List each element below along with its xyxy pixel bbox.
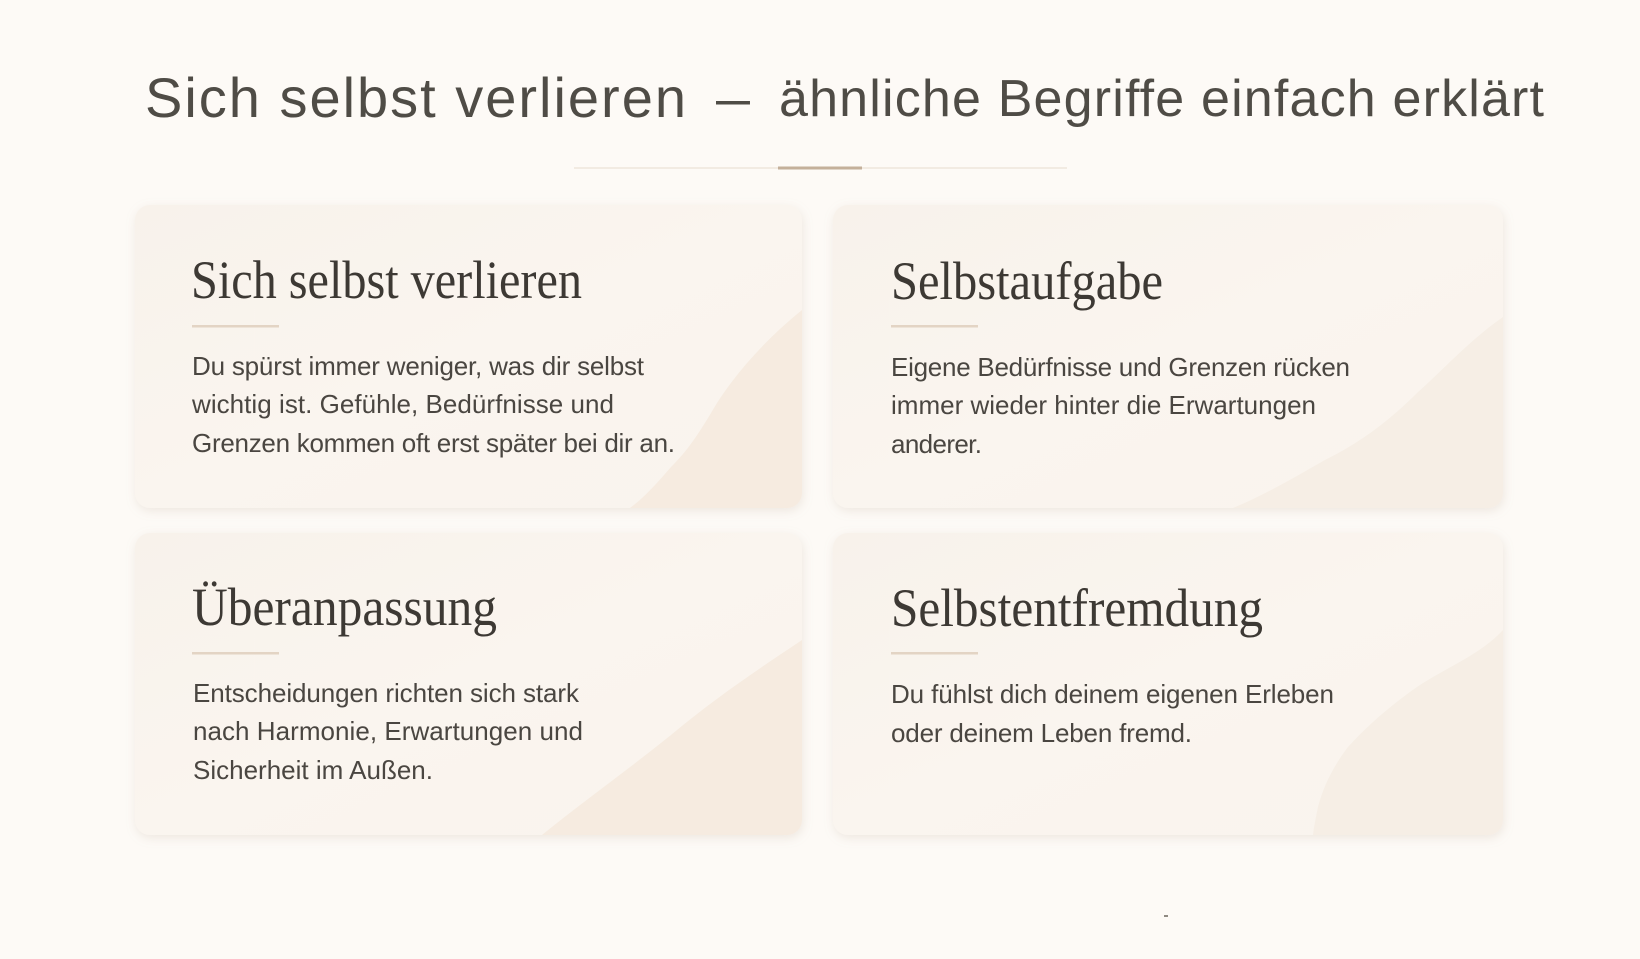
heading rule	[192, 325, 279, 328]
card text: nach Harmonie, Erwartungen und	[193, 716, 583, 746]
card text	[891, 352, 1350, 459]
card text: wichtig ist. Gefühle, Bedürfnisse und	[191, 389, 614, 419]
corner shape	[1313, 630, 1503, 835]
corner shape	[1233, 317, 1503, 508]
heading rule	[891, 652, 978, 654]
card text	[193, 678, 583, 785]
card heading: Selbstaufgabe	[891, 251, 1163, 311]
card heading: Selbstentfremdung	[891, 578, 1263, 638]
small mark	[1164, 915, 1168, 917]
corner shape	[542, 640, 802, 835]
card text	[891, 679, 1334, 748]
card text: oder deinem Leben fremd.	[891, 718, 1192, 748]
title	[145, 66, 1545, 129]
card text: immer wieder hinter die Erwartungen	[891, 390, 1316, 420]
card text: Du spürst immer weniger, was dir selbst	[192, 351, 645, 381]
card heading: Überanpassung	[192, 577, 497, 637]
panel: Sich selbst verlieren	[135, 205, 802, 508]
card text: Sicherheit im Außen.	[193, 755, 433, 785]
card text: Du fühlst dich deinem eigenen Erleben	[891, 679, 1334, 709]
card text: Grenzen kommen oft erst später bei dir an.	[192, 428, 675, 458]
card text: anderer.	[891, 429, 982, 459]
card text	[191, 351, 675, 458]
infographic canvas	[134, 76, 1544, 917]
panel: Selbstaufgabe	[833, 205, 1503, 508]
panel: Selbstentfremdung	[833, 533, 1503, 835]
heading rule	[891, 325, 978, 328]
panel: Überanpassung	[135, 533, 802, 835]
card text: Eigene Bedürfnisse und Grenzen rücken	[891, 352, 1350, 382]
corner shape	[630, 310, 802, 508]
title: ähnliche Begriffe einfach erklärt	[779, 70, 1545, 128]
card heading: Sich selbst verlieren	[191, 250, 582, 310]
heading rule	[192, 652, 279, 654]
title divider	[574, 166, 1067, 170]
title: Sich selbst verlieren	[145, 66, 686, 129]
card text: Entscheidungen richten sich stark	[193, 678, 580, 708]
title: –	[716, 70, 750, 128]
